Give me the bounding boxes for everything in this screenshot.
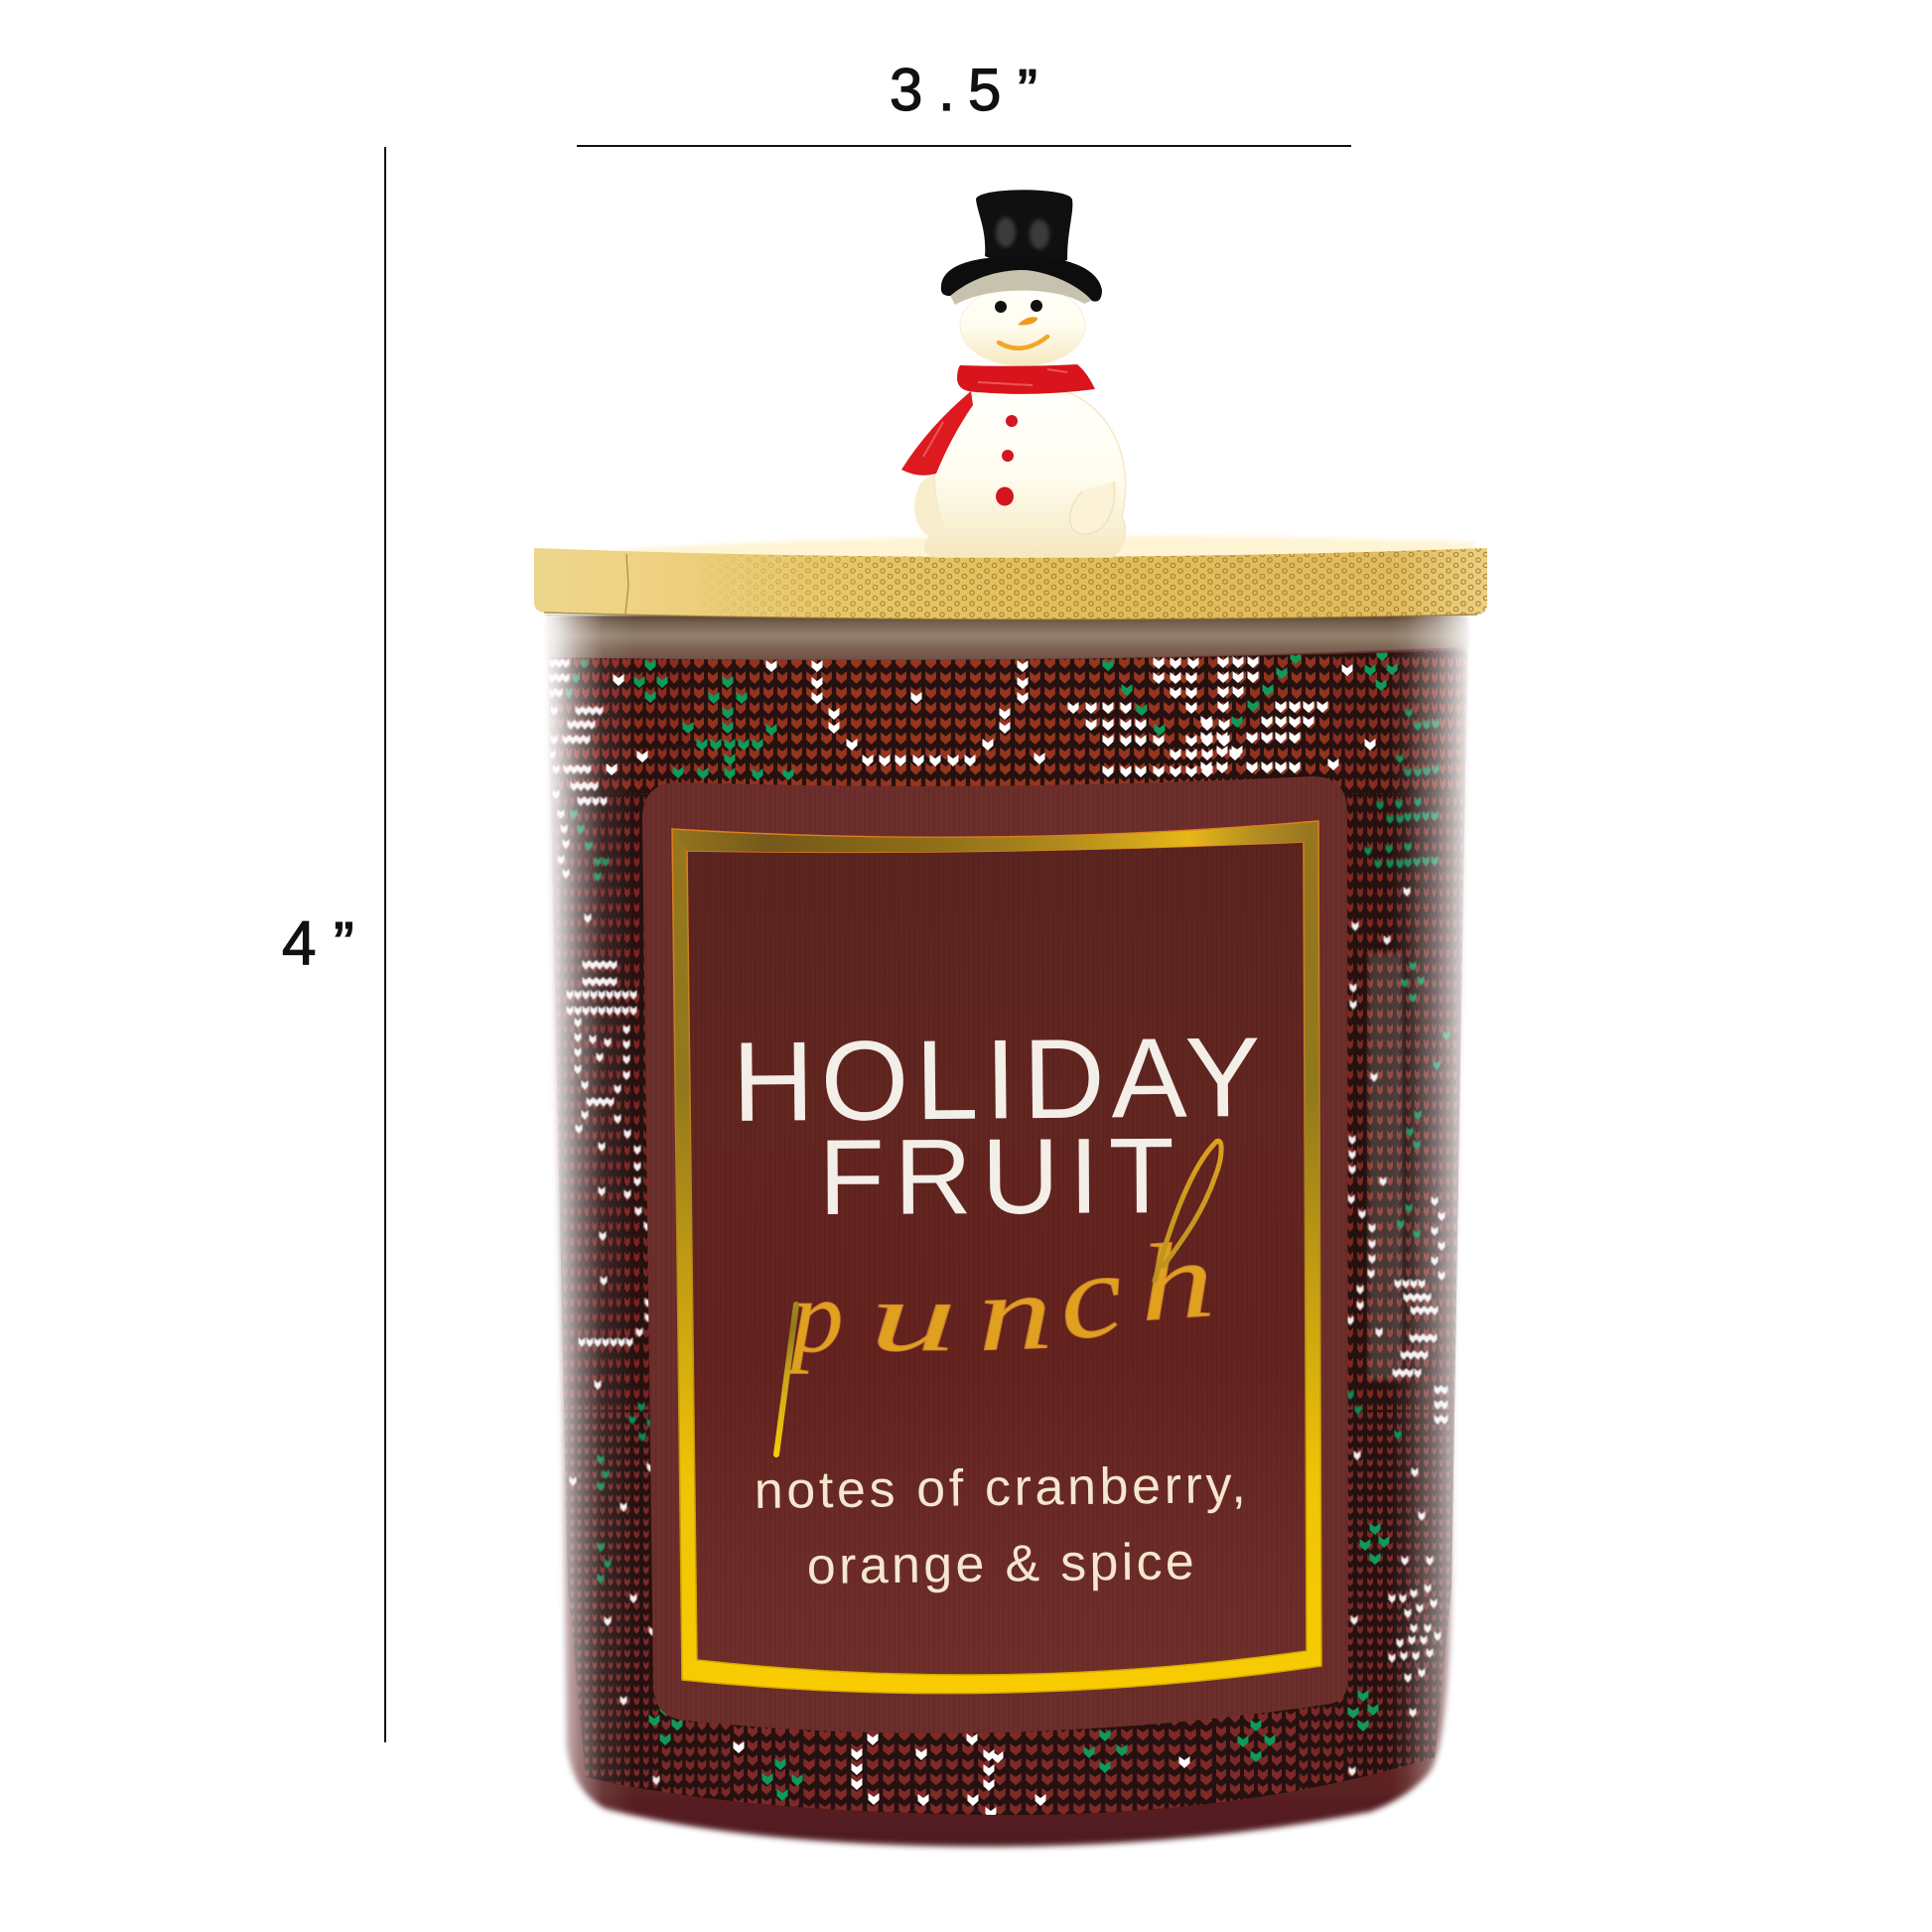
gold script: punch: u	[870, 1262, 957, 1372]
gold script: punch: c	[1049, 1226, 1131, 1366]
width dimension line	[577, 145, 1351, 147]
bamboo lid	[534, 534, 1487, 621]
label background	[642, 776, 1348, 1733]
snowman figurine	[901, 190, 1126, 557]
hat brim	[941, 256, 1102, 302]
label inner panel	[675, 824, 1321, 1692]
label fine ribbing	[642, 776, 1348, 1733]
knit sweater wrap	[541, 645, 1475, 1827]
right side blur haze	[1385, 616, 1479, 1847]
scent notes line 2: orange & spice	[806, 1533, 1194, 1595]
gold foil frame	[672, 821, 1321, 1694]
scarf tail	[901, 391, 973, 476]
knit stitches: bottom band	[661, 1696, 1344, 1815]
gold foil frame top bar	[673, 822, 1317, 852]
smile	[999, 337, 1047, 348]
hat brim underside	[945, 270, 1097, 305]
lid underside shadow	[544, 613, 1477, 620]
gold script: punch: n	[976, 1253, 1054, 1374]
gold script: punch	[776, 1141, 1221, 1454]
title: Fruit: FRUIT	[818, 1115, 1174, 1237]
green stitches	[569, 655, 1447, 1795]
scarf highlights	[923, 369, 1067, 457]
title: Holiday: HOLIDAY	[732, 1015, 1261, 1146]
width dimension label: ”	[1018, 58, 1037, 124]
body	[925, 392, 1126, 557]
candle jar	[536, 616, 1479, 1847]
carrot nose	[1018, 317, 1037, 326]
scarf	[957, 364, 1095, 394]
gold script: punch: p	[784, 1258, 844, 1374]
buttons	[996, 415, 1018, 506]
knit stitches: upper band	[541, 650, 1475, 794]
lid bamboo dot texture	[717, 548, 1487, 620]
lid front edge	[534, 548, 1487, 620]
script flourishes	[776, 1141, 1221, 1454]
lid top surface	[616, 536, 1474, 559]
height dimension line	[384, 147, 386, 1742]
glass rim under lid	[545, 616, 1468, 661]
white stitches	[552, 662, 1445, 1813]
paper label	[642, 776, 1348, 1733]
hat highlights	[996, 217, 1049, 249]
lid seam	[625, 554, 628, 614]
infographic: candle jar with dimensions	[282, 68, 1487, 1852]
eyes	[995, 300, 1042, 313]
hat crown	[976, 190, 1072, 263]
gold script: punch: h	[1135, 1219, 1218, 1344]
right arm	[1070, 482, 1115, 534]
width dimension label: .	[938, 57, 955, 123]
left arm	[914, 476, 954, 537]
height dimension label: ”	[334, 910, 354, 979]
right side reflection	[1368, 953, 1402, 1380]
head	[960, 285, 1085, 366]
height dimension label: 4	[282, 909, 316, 978]
scent notes line 1: notes of cranberry,	[754, 1456, 1246, 1520]
width dimension label: 3	[890, 57, 922, 123]
knit background	[541, 645, 1474, 1827]
knit stitches: side panels	[541, 794, 1475, 1827]
width dimension label: 5	[968, 57, 1001, 123]
jar glass body	[545, 621, 1468, 1847]
left side blur haze	[536, 616, 640, 1847]
